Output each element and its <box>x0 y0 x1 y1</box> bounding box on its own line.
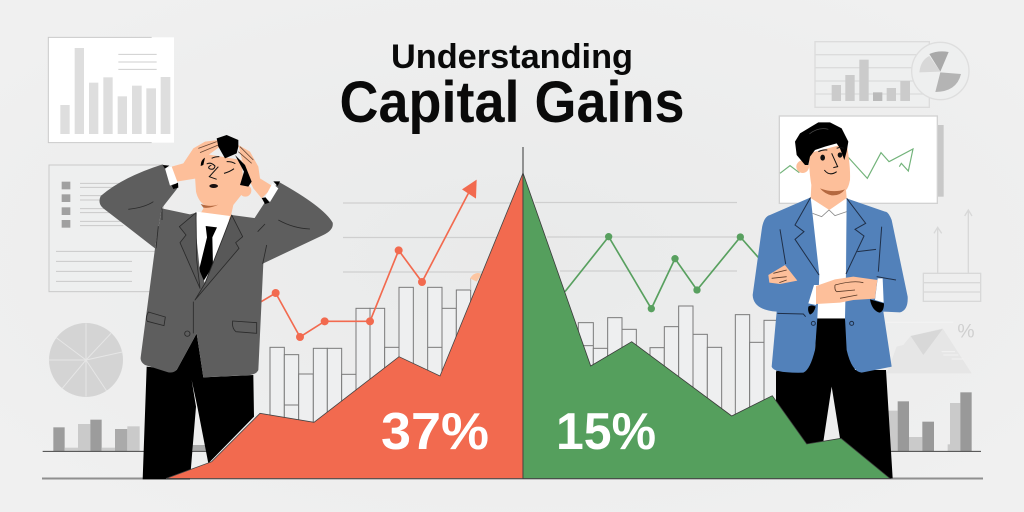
area chart: red 37% <box>166 173 523 478</box>
neck and face <box>808 143 850 210</box>
line chart: green fluctuating trend <box>565 233 760 312</box>
chart grid lines <box>343 202 737 272</box>
pie chart left <box>49 323 123 397</box>
jacket <box>99 164 333 377</box>
character: confident man in blue blazer <box>753 122 908 478</box>
title line one: Understanding <box>391 38 633 76</box>
character: stressed man in grey suit <box>99 135 333 479</box>
title line two: Capital Gains <box>340 70 684 135</box>
panel: background document left <box>49 165 163 292</box>
panel: ledger with rising arrows <box>923 210 981 301</box>
cuffs <box>165 167 178 186</box>
shirt and tie <box>196 212 230 272</box>
hands <box>172 140 220 182</box>
bar chart lower right <box>887 392 981 451</box>
stressed face features <box>201 158 205 166</box>
blazer <box>753 197 819 373</box>
panel: green side bars <box>578 306 777 418</box>
value label 15%: 15% <box>556 403 656 461</box>
panel: background chart bottom right <box>887 321 975 373</box>
trousers <box>143 333 254 479</box>
trousers <box>776 318 893 478</box>
line chart: red rising trend with arrow <box>250 180 477 341</box>
area chart: green 15% <box>523 173 890 478</box>
panel: red side bars <box>270 273 482 462</box>
value label 37%: 37% <box>381 403 489 461</box>
panel: background bar chart card top left <box>48 37 174 143</box>
panel: white chart board behind confident man <box>779 116 944 203</box>
panel: background chart bottom right: % <box>957 321 975 342</box>
bar chart lower left <box>43 420 207 451</box>
face features <box>820 155 825 161</box>
shirt <box>811 197 847 318</box>
cuffs and crossed hands <box>808 285 820 305</box>
hair <box>217 135 238 158</box>
panel: background chart top right <box>815 42 969 107</box>
chart baselines <box>42 147 983 478</box>
hair <box>795 122 848 165</box>
neck and face <box>195 153 244 220</box>
